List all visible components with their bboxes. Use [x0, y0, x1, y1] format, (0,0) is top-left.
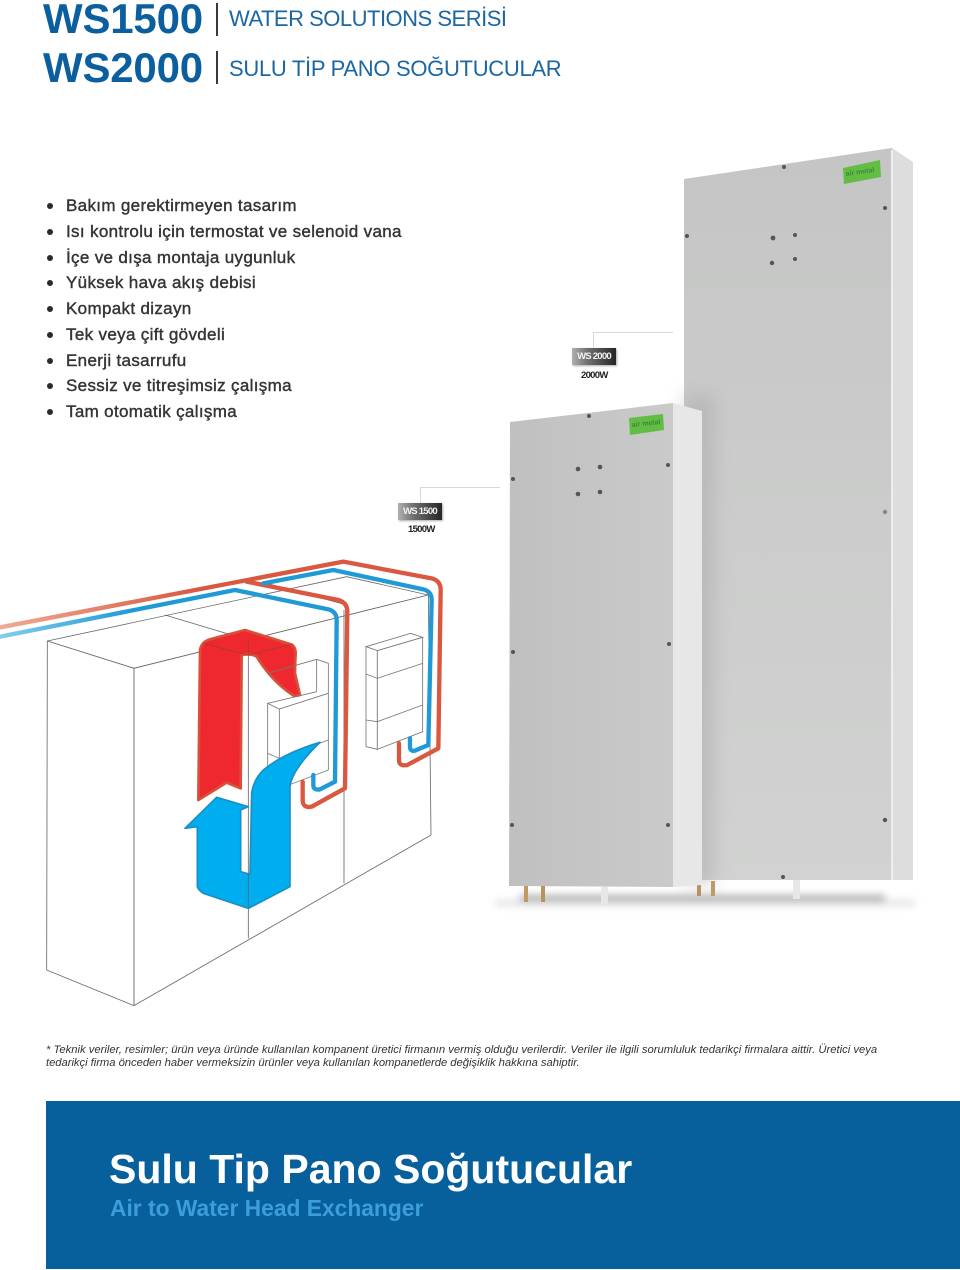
- feature list: Kompakt dizayn: [66, 299, 192, 318]
- inner unit outline: WS 2000: [366, 633, 423, 749]
- banner title: Sulu Tip Pano Soğutucular: [109, 1146, 632, 1192]
- feature list: İçe ve dışa montaja uygunluk: [66, 248, 295, 267]
- screws: [685, 165, 887, 879]
- wattage: 2000W: 2000W: [581, 370, 608, 381]
- feature list: Isı kontrolu için termostat ve selenoid vana: [66, 222, 402, 241]
- model tag: WS 1500: [398, 503, 442, 520]
- logo badge: [629, 414, 664, 435]
- water pipes: hot: [0, 562, 441, 807]
- legs: [697, 880, 800, 899]
- model tag: WS 2000: [572, 348, 616, 365]
- feature list: [47, 196, 402, 421]
- feature list: Tek veya çift gövdeli: [66, 325, 225, 344]
- feature list: Sessiz ve titreşimsiz çalışma: [66, 376, 292, 395]
- electrical cabinet outline: [47, 577, 431, 1006]
- feature list: Enerji tasarrufu: [66, 351, 187, 370]
- screws: [510, 414, 671, 827]
- water pipes: cold: [0, 570, 432, 790]
- model tag: WS 1500: WS 1500: [403, 506, 437, 517]
- banner: [46, 1101, 960, 1269]
- air flow: hot (red): [198, 630, 300, 800]
- floor shadow: [495, 896, 915, 906]
- title block: [43, 0, 561, 91]
- cabinet: WS 2000: [684, 148, 913, 899]
- footnote: * Teknik veriler, resimler; ürün veya üründe kullanılan kompanent üretici firmanın vermiş olduğu verilerdir. Veriler ile ilgili sorumluluk tedarikçi firmalara aittir. Üretici veya: [46, 1044, 877, 1056]
- series heading: WATER SOLUTIONS SERİSİ: [229, 6, 506, 31]
- logo badge: air metal: [845, 167, 875, 178]
- logo badge: [843, 160, 881, 184]
- leader line: WS 1500: [420, 487, 500, 503]
- air flow: cold (blue): [185, 742, 320, 908]
- footnote: [46, 1044, 877, 1069]
- model tag: WS 2000: WS 2000: [577, 351, 611, 362]
- footnote: tedarikçi firma önceden haber vermeksizin ürünler veya kullanılan kompanetlerde değişiklik hakkına sahiptir.: [46, 1057, 580, 1069]
- feature list: Yüksek hava akış debisi: [66, 273, 256, 292]
- banner subtitle: Air to Water Head Exchanger: [110, 1195, 423, 1221]
- logo badge: air metal: [631, 419, 661, 429]
- cabinet: WS 1500: [509, 403, 702, 905]
- feature list: Tam otomatik çalışma: [66, 402, 237, 421]
- wattage: 1500W: 1500W: [408, 524, 435, 535]
- shadow from WS 1500 onto WS 2000: [684, 395, 714, 885]
- product heading: SULU TİP PANO SOĞUTUCULAR: [229, 56, 561, 81]
- model heading: WS2000: WS2000: [43, 44, 203, 91]
- legs: [524, 886, 608, 905]
- feature list: Bakım gerektirmeyen tasarım: [66, 196, 297, 215]
- diagram: cabinet air and water circuit: [0, 560, 443, 1006]
- inner unit outline: WS 1500: [203, 640, 328, 788]
- leader line: WS 2000: [593, 332, 673, 348]
